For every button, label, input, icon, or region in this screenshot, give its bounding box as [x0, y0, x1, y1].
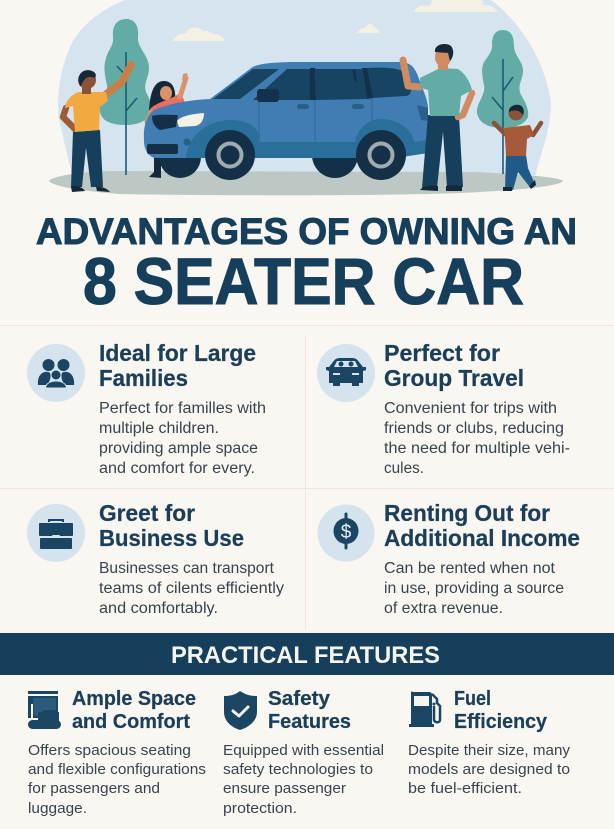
body text: [99, 400, 266, 477]
heading: Perfect for: [384, 340, 500, 366]
icon: seating: [28, 691, 61, 729]
body text: and comfort for every.: [99, 460, 255, 477]
body text: Perfect for familles with: [99, 400, 266, 417]
panel: ideal for large families: [27, 340, 266, 477]
heading: [99, 340, 256, 391]
body text: and comfortably.: [99, 600, 218, 617]
body text: multiple children.: [99, 420, 219, 437]
banner: practical features: [0, 633, 614, 675]
person: woman waving: [147, 73, 188, 178]
body text: [384, 400, 570, 477]
advantages grid dividers: [0, 326, 614, 630]
icon: family: [27, 344, 85, 402]
icon: dollar coin: [318, 504, 374, 562]
person: man in yellow shirt: [63, 65, 131, 192]
body text: [408, 743, 571, 797]
title: 8 SEATER CAR: [83, 244, 524, 318]
body text: cules.: [384, 460, 424, 477]
body text: teams of cilents efficiently: [99, 580, 284, 597]
body text: [384, 560, 564, 617]
icon: car with passengers: [317, 344, 375, 402]
body text: [99, 560, 284, 617]
hero illustration: [49, 0, 563, 195]
body text: Convenient for trips with: [384, 400, 557, 417]
heading: [72, 687, 196, 733]
body text: Can be rented when not: [384, 560, 556, 577]
heading: Ideal for Large: [99, 340, 256, 366]
wheels: [205, 130, 406, 180]
heading: Fuel: [454, 687, 491, 710]
rear back wheel shadow: [159, 136, 201, 178]
icon: briefcase: [27, 504, 85, 562]
heading: Safety: [268, 687, 331, 710]
heading: [384, 500, 580, 551]
heading: [99, 500, 244, 551]
heading: Families: [99, 365, 188, 391]
panel: fuel efficiency: [408, 687, 571, 797]
heading: and Comfort: [72, 710, 190, 733]
body text: protection.: [223, 801, 297, 817]
heading: Group Travel: [384, 365, 524, 391]
panel: ample space and comfort: [28, 687, 206, 817]
person: child waving: [494, 105, 541, 191]
clouds: [173, 0, 497, 41]
body text: safety technologies to: [223, 762, 373, 778]
panel: safety features: [223, 687, 384, 817]
title: [36, 210, 577, 318]
banner: practical features: PRACTICAL FEATURES: [171, 642, 440, 669]
body text: for passengers and: [28, 781, 160, 797]
tree right: [477, 30, 528, 174]
body text: friends or clubs, reducing: [384, 420, 564, 437]
body text: Businesses can transport: [99, 560, 275, 577]
body text: in use, providing a source: [384, 580, 564, 597]
heading: [454, 687, 548, 733]
heading: Business Use: [99, 525, 244, 551]
body text: [223, 743, 384, 817]
body text: of extra revenue.: [384, 600, 503, 617]
body text: be fuel-efficient.: [408, 781, 522, 797]
heading: Renting Out for: [384, 500, 550, 526]
body text: [28, 743, 206, 817]
body text: luggage.: [28, 801, 87, 817]
sky backdrop: [58, 0, 551, 175]
body text: Offers spacious seating: [28, 743, 191, 759]
ground: [49, 171, 563, 195]
body text: Despite their size, many: [408, 743, 571, 759]
panel: perfect for group travel: [317, 340, 570, 477]
body text: models are designed to: [408, 762, 570, 778]
body text: providing ample space: [99, 440, 258, 457]
heading: [268, 687, 351, 733]
body text: Equipped with essential: [223, 743, 384, 759]
blue car: [144, 62, 428, 158]
panel: renting out for additional income: [318, 500, 580, 617]
heading: Features: [268, 710, 351, 733]
tree left: [100, 19, 152, 175]
icon: dollar coin: $: [341, 522, 352, 543]
icon: fuel pump: [409, 692, 440, 727]
title: ADVANTAGES OF OWNING AN: [36, 210, 577, 252]
body text: the need for multiple vehi-: [384, 440, 570, 457]
icon: shield: [224, 691, 257, 730]
panel: great for business use: [27, 500, 284, 617]
heading: [384, 340, 524, 391]
heading: Greet for: [99, 500, 195, 526]
body text: and flexible configurations: [28, 762, 206, 778]
heading: Efficiency: [454, 710, 548, 733]
heading: Ample Space: [72, 687, 196, 710]
heading: Additional Income: [384, 525, 580, 551]
body text: ensure passenger: [223, 781, 346, 797]
person: man in teal shirt: [403, 44, 472, 191]
